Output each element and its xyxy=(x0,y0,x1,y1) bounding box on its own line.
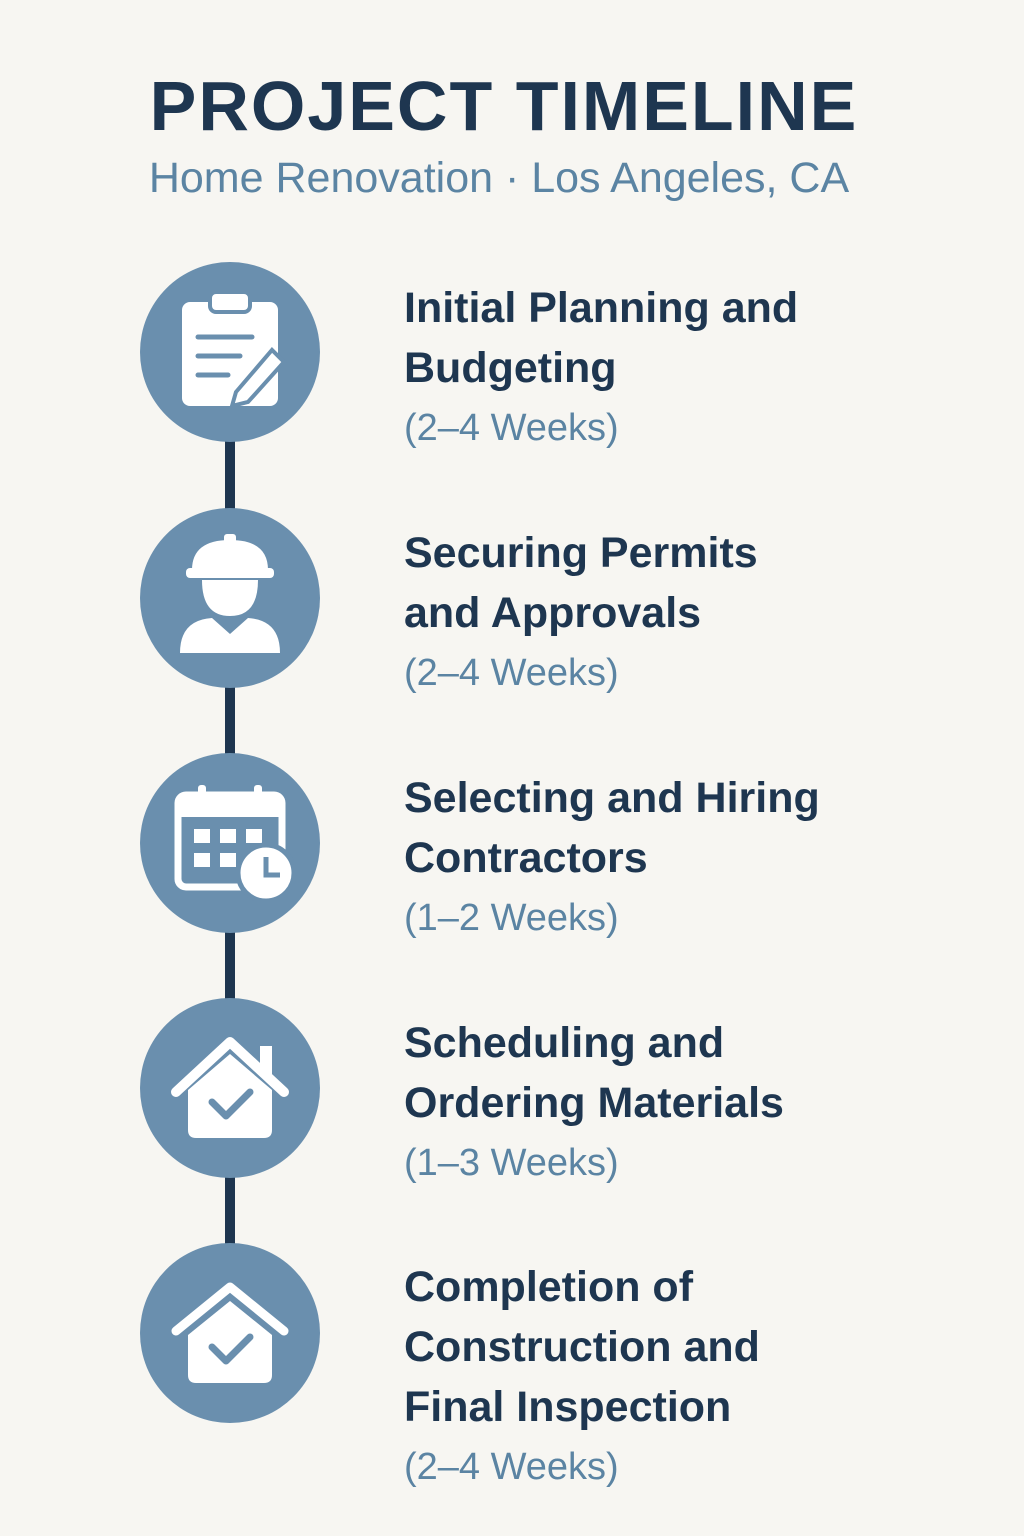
step 2 text: and Approvals xyxy=(404,589,701,637)
step 1 text: (2–4 Weeks) xyxy=(404,407,619,449)
step 4 text: Scheduling and xyxy=(404,1019,724,1067)
icon: house check xyxy=(140,998,320,1178)
step 5 text xyxy=(404,1263,760,1488)
step 4 text: Ordering Materials xyxy=(404,1079,784,1127)
step 4 text xyxy=(404,1019,784,1184)
step 1 text: Initial Planning and xyxy=(404,284,798,332)
icon: calendar xyxy=(140,753,320,933)
step 3 text: (1–2 Weeks) xyxy=(404,897,619,939)
step 3 text: Selecting and Hiring xyxy=(404,774,820,822)
step 1 text: Budgeting xyxy=(404,344,617,392)
step 5 text: (2–4 Weeks) xyxy=(404,1446,619,1488)
step 3 text xyxy=(404,774,820,939)
step 5 text: Completion of xyxy=(404,1263,693,1311)
step 3 text: Contractors xyxy=(404,834,648,882)
step 4 text: (1–3 Weeks) xyxy=(404,1142,619,1184)
title: PROJECT TIMELINE xyxy=(150,67,858,145)
connector line xyxy=(225,400,235,1300)
subtitle: Home Renovation · Los Angeles, CA xyxy=(149,154,849,202)
step 5 text: Final Inspection xyxy=(404,1383,731,1431)
icon: worker xyxy=(140,508,320,688)
step 1 text xyxy=(404,284,798,449)
icon: house check final xyxy=(140,1243,320,1423)
step 2 text: (2–4 Weeks) xyxy=(404,652,619,694)
step 2 text: Securing Permits xyxy=(404,529,758,577)
step 2 text xyxy=(404,529,758,694)
step 5 text: Construction and xyxy=(404,1323,760,1371)
icon: clipboard xyxy=(140,262,320,442)
